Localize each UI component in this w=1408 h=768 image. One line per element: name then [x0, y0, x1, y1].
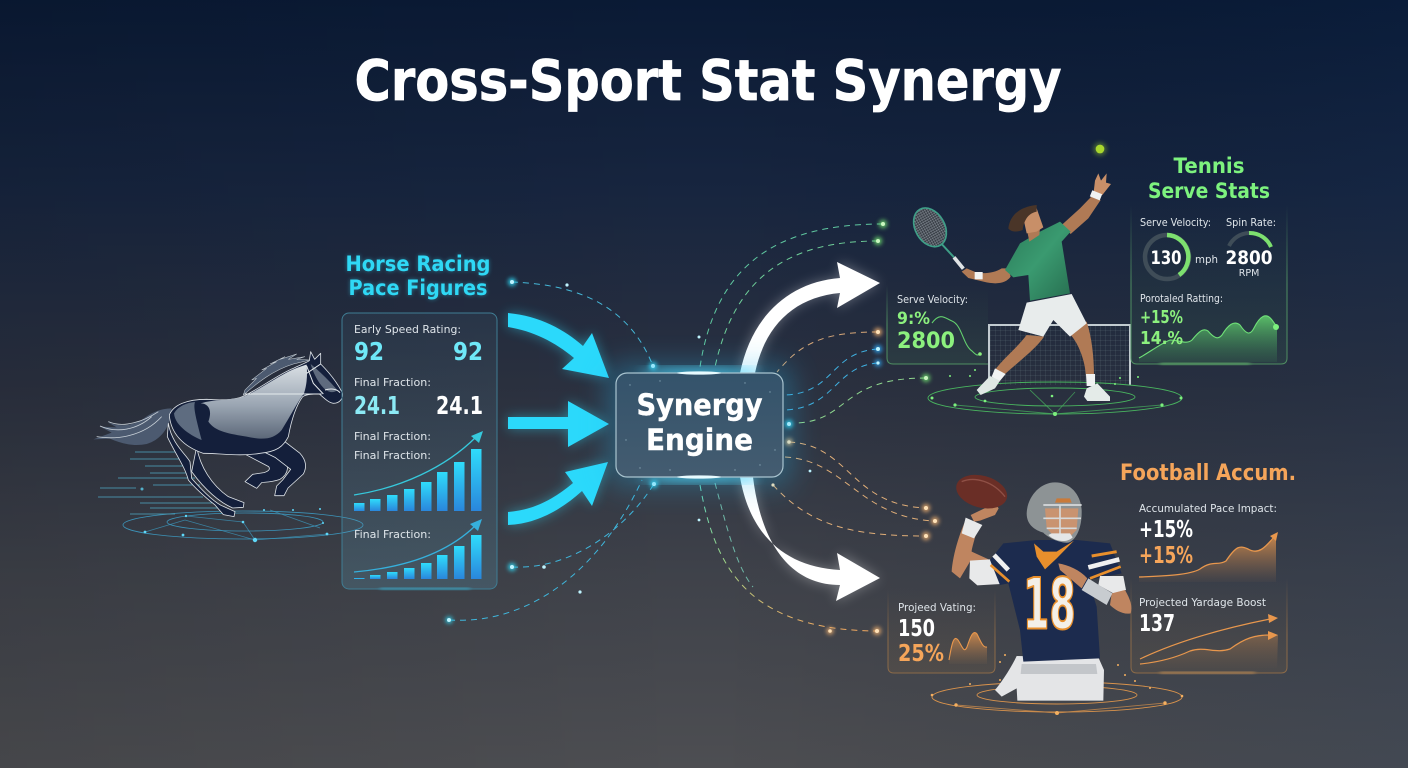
area chart: rating: Porotaled Ratting:: [1140, 293, 1223, 305]
bridle: [243, 364, 340, 394]
sleeve stripes: [991, 552, 1121, 582]
connector nodes: [446, 220, 939, 635]
tennis net: [989, 325, 1130, 385]
panel: tennis left stats: 9:%: [897, 309, 930, 329]
football: [952, 469, 1011, 514]
bar chart: upper: [354, 431, 483, 511]
engine label: Engine: [646, 423, 753, 457]
belt: [1021, 664, 1097, 674]
horse racing heading: Horse Racing: [346, 252, 490, 276]
arrow: to football: [740, 477, 880, 601]
head detail: [311, 364, 337, 392]
panel: tennis left stats: [887, 285, 988, 364]
horse track rings: [123, 508, 363, 542]
panel: football left stats: 150: [898, 616, 935, 642]
connector lines: dashed data flows: [449, 224, 935, 631]
far hind leg: [192, 447, 244, 508]
stat: final fraction: Final Fraction:: [354, 377, 431, 389]
stat: accumulated pace impact: +15%: [1139, 517, 1193, 543]
panel: tennis left stats: 2800: [897, 329, 955, 354]
gauge: serve velocity: 130: [1150, 247, 1182, 269]
tennis ground rings: [928, 369, 1182, 416]
haunch highlight: [174, 402, 202, 440]
tail: [93, 408, 172, 445]
stat: early speed rating: 92: [453, 337, 483, 366]
icon: football quarterback: [952, 469, 1131, 701]
panel: horse racing pace figures: [342, 313, 497, 590]
far front leg: [243, 442, 287, 488]
raised hand: [971, 503, 999, 522]
stat: final fraction: [354, 377, 483, 420]
mane: [243, 354, 310, 395]
back arm: [962, 268, 1011, 283]
shirt: [1005, 222, 1071, 301]
area chart: rating: 14.%: [1140, 328, 1183, 349]
body highlight: [201, 365, 307, 439]
bar chart: upper: Final Fraction:: [354, 431, 431, 443]
raised hand and wristband: [1090, 173, 1111, 200]
icon: galloping horse: [93, 352, 343, 517]
jersey: [990, 540, 1122, 662]
body and neck silhouette: [169, 352, 343, 455]
bar chart: lower: Final Fraction:: [354, 529, 431, 541]
heading: tennis serve stats: Tennis: [1174, 154, 1244, 178]
stat: early speed rating: 92: [354, 337, 384, 366]
jersey collar: [1034, 541, 1074, 569]
stat: accumulated pace impact: +15%: [1139, 543, 1193, 569]
gauge: spin rate: 2800: [1226, 247, 1272, 269]
stat: final fraction: 24.1: [436, 391, 483, 420]
arrow: top cyan: [508, 313, 609, 378]
racket: [907, 202, 963, 269]
heading: football accum: Football Accum.: [1120, 461, 1296, 486]
stat: early speed rating: Early Speed Rating:: [354, 324, 461, 336]
panel: tennis serve stats: [1131, 154, 1287, 364]
stat: projected yardage boost: Projected Yardage Boost: [1139, 597, 1266, 609]
armband: [962, 518, 982, 538]
stat: final fraction: 24.1: [354, 391, 400, 420]
arrows: horse data into engine: [508, 313, 609, 525]
near front leg: [257, 437, 306, 496]
icon: tennis player: [907, 142, 1111, 401]
horse racing heading: [346, 252, 490, 300]
raised arm: [1062, 197, 1101, 234]
gauge: spin rate: [1226, 217, 1276, 279]
gauge: spin rate: RPM: [1239, 268, 1259, 279]
shorts: [1018, 294, 1087, 337]
arrows: engine out to tennis and football: [740, 262, 880, 601]
jersey number: 18: [1023, 562, 1076, 645]
sleeve: [969, 559, 1001, 585]
horse racing heading: Pace Figures: [348, 276, 488, 300]
area chart: rating: +15%: [1140, 307, 1183, 328]
gauge: serve velocity: mph: [1195, 254, 1218, 266]
arrow: bottom cyan: [508, 462, 608, 525]
right leg: [1071, 322, 1094, 376]
wristband: [975, 272, 983, 279]
horse speed lines: [98, 452, 220, 514]
near hind leg: [167, 423, 235, 517]
helmet and face: [1027, 482, 1082, 543]
panel: football left stats: [888, 590, 995, 673]
stat: accumulated pace impact: Accumulated Pace Impact:: [1139, 503, 1277, 515]
gauge: serve velocity: [1140, 217, 1218, 279]
panel: football left stats: 25%: [898, 641, 944, 667]
stat: accumulated pace impact: [1139, 503, 1278, 582]
arrow: to tennis: [740, 262, 880, 373]
horse racing heading: Pace Figures: [348, 276, 488, 300]
heading: tennis serve stats: [1148, 154, 1270, 203]
panel: tennis left stats: Serve Velocity:: [897, 294, 968, 306]
forward arm: [1058, 563, 1131, 614]
socks and shoes: [977, 368, 1110, 401]
title: Cross-Sport Stat Synergy: [354, 49, 1062, 114]
bar chart: upper: Final Fraction:: [354, 450, 431, 462]
tennis ball: [1093, 142, 1107, 156]
panel: football left stats: Projeed Vating:: [898, 602, 976, 614]
gauge: spin rate: Spin Rate:: [1226, 217, 1276, 229]
stat: early speed rating: [354, 324, 483, 366]
neck and head: [1008, 205, 1043, 242]
left leg: [995, 335, 1044, 374]
bar chart: lower: [354, 519, 482, 579]
stat: projected yardage boost: 137: [1139, 611, 1175, 637]
area chart: rating: [1139, 293, 1279, 362]
stat: projected yardage boost: [1139, 597, 1278, 668]
raised arm: [952, 522, 990, 578]
football ground rings: [931, 654, 1183, 715]
engine label: Synergy: [636, 388, 763, 422]
arrow: middle cyan: [508, 401, 609, 447]
synergy engine: [606, 363, 793, 487]
horse racing heading: Horse Racing: [346, 252, 490, 276]
pants: [995, 656, 1104, 701]
heading: tennis serve stats: Serve Stats: [1148, 179, 1270, 203]
gauge: serve velocity: Serve Velocity:: [1140, 217, 1211, 229]
panel: football accumulation: [1120, 461, 1296, 674]
